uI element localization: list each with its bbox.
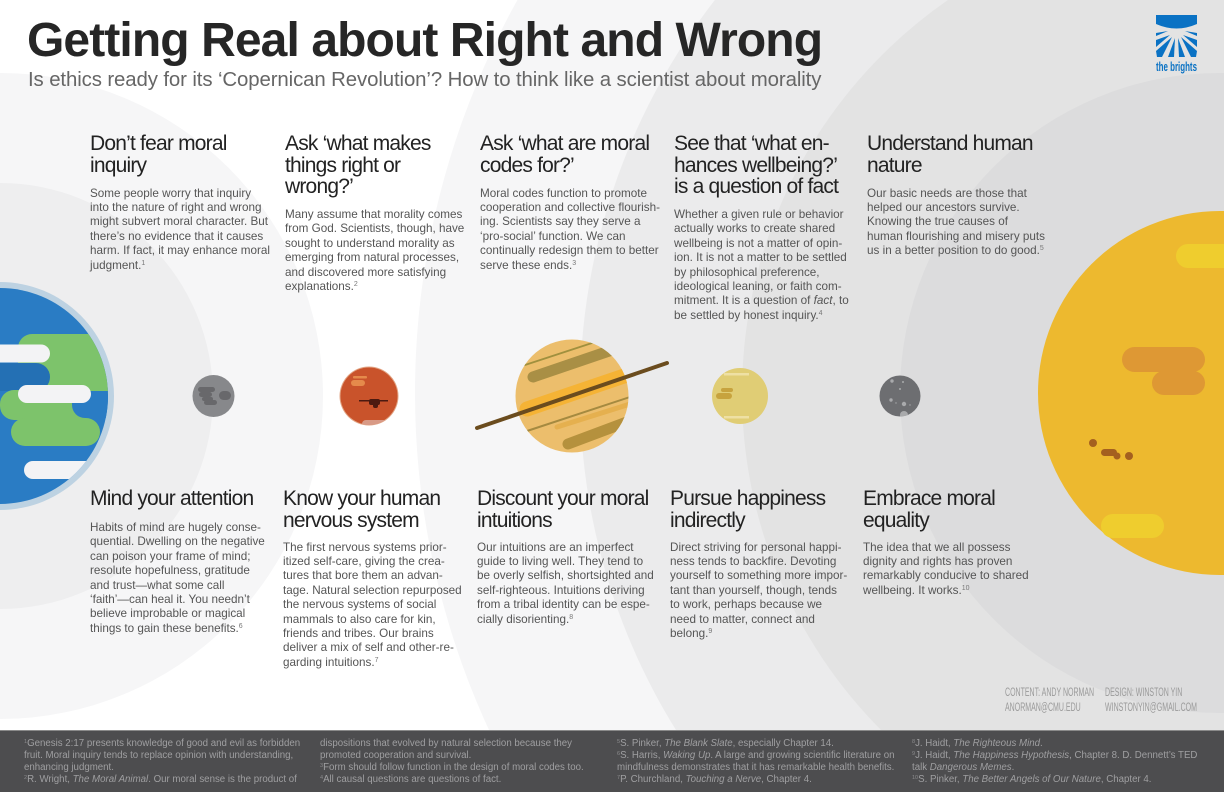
panel: Don't fear moral inquiry: might subvert moral character. But xyxy=(90,215,268,228)
panel: Understand human nature: helped our ancestors survive. xyxy=(867,201,1020,214)
panel: Ask what makes things right or wrong: explanations.2 xyxy=(285,280,358,293)
panel: See that what enhances wellbeing is a question of fact xyxy=(674,132,849,322)
panel: Pursue happiness indirectly: Pursue happiness xyxy=(670,487,825,510)
credits: content: ANORMAN@CMU.EDU xyxy=(1005,702,1081,714)
panel: Ask what makes things right or wrong xyxy=(285,132,464,293)
footnotes column 2: dispositions that evolved by natural selection because they xyxy=(320,738,572,749)
panel: Know your human nervous system: itized self-care, giving the crea- xyxy=(283,555,445,568)
icon: the brights logo: the brights xyxy=(1156,60,1197,74)
footnotes column 1 xyxy=(24,738,300,785)
panel: Understand human nature: human flourishing and misery puts xyxy=(867,230,1045,243)
panel: See that what enhances wellbeing is a question of fact: wellbeing is not a matter of opin- xyxy=(674,237,842,250)
panel: Mind your attention: Mind your attention xyxy=(90,487,253,510)
panel: Discount your moral intuitions: self-righteous. Intuitions deriving xyxy=(477,584,645,597)
footnotes column 3 xyxy=(617,738,894,785)
panel: See that what enhances wellbeing is a question of fact: hances wellbeing?’ xyxy=(674,154,837,176)
panel: Discount your moral intuitions: from a tribal identity can be espe- xyxy=(477,598,650,611)
panel: Embrace moral equality xyxy=(863,487,1029,597)
panel: Embrace moral equality: remarkably conducive to shared xyxy=(863,569,1029,582)
panel: See that what enhances wellbeing is a question of fact: by philosophical preference, xyxy=(674,266,820,279)
panel: Don't fear moral inquiry: harm. If fact, it may enhance moral xyxy=(90,244,270,257)
icon: earth xyxy=(0,282,114,510)
panel: Ask what makes things right or wrong: emerging from natural processes, xyxy=(285,251,459,264)
panel: Know your human nervous system: garding intuitions.7 xyxy=(283,656,379,669)
panel: Understand human nature: Our basic needs are those that xyxy=(867,186,1027,200)
panel: Discount your moral intuitions xyxy=(477,487,654,626)
footnotes column 1: 2R. Wright, The Moral Animal. Our moral sense is the product of xyxy=(24,774,297,785)
credits: content: CONTENT: ANDY NORMAN xyxy=(1005,687,1094,699)
icon: sun xyxy=(1038,211,1224,575)
panel: Embrace moral equality: equality xyxy=(863,508,929,532)
panel: Mind your attention: ‘faith’—can heal it. You needn’t xyxy=(90,593,250,606)
panel: Know your human nervous system: deliver a mix of self and other-re- xyxy=(283,641,454,654)
panel: Mind your attention: believe improbable or magical xyxy=(90,607,245,620)
panel: Don't fear moral inquiry: Don’t fear moral xyxy=(90,132,227,155)
panel: Ask what are moral codes for: serve these ends.3 xyxy=(480,259,576,272)
panel: Know your human nervous system: friends and tribes. Our brains xyxy=(283,627,434,640)
panel: Pursue happiness indirectly: ness tends to backfire. Devoting xyxy=(670,555,836,568)
panel: Ask what makes things right or wrong: sought to understand morality as xyxy=(285,237,455,250)
panel: Ask what makes things right or wrong: things right or xyxy=(285,154,400,176)
panel: Don't fear moral inquiry: inquiry xyxy=(90,154,146,176)
icon: the brights logo xyxy=(1156,15,1197,74)
panel: See that what enhances wellbeing is a question of fact: actually works to create shared xyxy=(674,222,835,235)
panel: Discount your moral intuitions: Our intuitions are an imperfect xyxy=(477,540,634,554)
panel: See that what enhances wellbeing is a question of fact: See that ‘what en- xyxy=(674,132,829,155)
panel: Embrace moral equality: Embrace moral xyxy=(863,487,995,510)
footnotes column 2: promoted cooperation and survival. xyxy=(320,750,471,761)
panel: See that what enhances wellbeing is a question of fact: mitment. It is a question of fact, to xyxy=(674,294,849,307)
panel: See that what enhances wellbeing is a question of fact: ideological leaning, or faith com- xyxy=(674,280,842,293)
panel: Ask what are moral codes for: ‘pro-social’ function. We can xyxy=(480,230,626,243)
panel: Don't fear moral inquiry: there’s no evidence that it causes xyxy=(90,230,263,243)
footnotes column 2: 3Form should follow function in the design of moral codes too. xyxy=(320,762,584,773)
panel: Know your human nervous system: Know your human xyxy=(283,487,440,510)
panel: Discount your moral intuitions: Discount your moral xyxy=(477,487,649,510)
panel: Pursue happiness indirectly: to work, perhaps because we xyxy=(670,598,822,611)
panel: Know your human nervous system: tures that bore them an advan- xyxy=(283,569,443,582)
footnotes column 4: 9J. Haidt, The Happiness Hypothesis, Chapter 8. D. Dennett’s TED xyxy=(912,750,1197,761)
icon: grey moon xyxy=(192,375,234,417)
credits: design: WINSTONYIN@GMAIL.COM xyxy=(1105,702,1197,714)
panel: Ask what are moral codes for: ing. Scientists say they serve a xyxy=(480,215,640,228)
footnotes column 3: 6S. Harris, Waking Up. A large and growing scientific literature on xyxy=(617,750,894,761)
panel: See that what enhances wellbeing is a question of fact: be settled by honest inquiry.4 xyxy=(674,309,823,322)
panel: Discount your moral intuitions: intuitions xyxy=(477,508,552,532)
panel: Know your human nervous system: The first nervous systems prior- xyxy=(283,540,447,554)
title: Getting Real about Right and Wrong xyxy=(27,14,822,66)
panel: Mind your attention: resolute hopefulness, gratitude xyxy=(90,564,250,577)
panel: Ask what makes things right or wrong: Ask ‘what makes xyxy=(285,132,431,155)
footnotes panel xyxy=(0,730,1224,792)
panel: Discount your moral intuitions: guide to living well. They tend to xyxy=(477,555,643,568)
panel: Embrace moral equality: wellbeing. It works.10 xyxy=(863,584,970,597)
credits: design xyxy=(1105,687,1197,714)
panel: Understand human nature: nature xyxy=(867,154,922,176)
panel: Pursue happiness indirectly: yourself to something more impor- xyxy=(670,569,847,582)
panel: Ask what are moral codes for: codes for?’ xyxy=(480,154,574,176)
panel: Pursue happiness indirectly: belong.9 xyxy=(670,627,712,640)
footnotes column 4: 10S. Pinker, The Better Angels of Our Nature, Chapter 4. xyxy=(912,774,1151,785)
panel: Ask what are moral codes for: Ask ‘what are moral xyxy=(480,132,649,155)
footnotes column 4: talk Dangerous Memes. xyxy=(912,762,1014,773)
panel: Pursue happiness indirectly: need to matter, connect and xyxy=(670,613,815,626)
panel: Understand human nature: Knowing the true causes of xyxy=(867,215,1008,228)
panel: Don't fear moral inquiry: Some people worry that inquiry xyxy=(90,186,251,200)
footnotes column 3: 7P. Churchland, Touching a Nerve, Chapter 4. xyxy=(617,774,812,785)
panel: Mind your attention: and trust—what some call xyxy=(90,579,224,592)
panel: Mind your attention: can poison your frame of mind; xyxy=(90,550,250,563)
icon: mars xyxy=(340,366,398,430)
credits: design: DESIGN: WINSTON YIN xyxy=(1105,687,1182,699)
panel: Embrace moral equality: The idea that we all possess xyxy=(863,540,1010,554)
icon: yellow planet xyxy=(712,368,768,424)
panel: Know your human nervous system: tage. Natural selection repurposed xyxy=(283,584,462,597)
panel: Understand human nature xyxy=(867,132,1045,257)
panel: Pursue happiness indirectly xyxy=(670,487,847,640)
panel: Ask what are moral codes for: cooperation and collective flourish- xyxy=(480,201,660,214)
panel: Embrace moral equality: dignity and rights has proven xyxy=(863,555,1012,568)
footnotes column 1: 1Genesis 2:17 presents knowledge of good and evil as forbidden xyxy=(24,738,300,749)
footnotes column 2: 4All causal questions are questions of fact. xyxy=(320,774,501,785)
footnotes column 2 xyxy=(320,738,584,785)
panel: Mind your attention xyxy=(90,487,265,635)
panel: See that what enhances wellbeing is a question of fact: Whether a given rule or behavior xyxy=(674,208,844,221)
credits: content xyxy=(1005,687,1094,714)
panel: Pursue happiness indirectly: Direct striving for personal happi- xyxy=(670,540,842,554)
panel: Ask what makes things right or wrong: Many assume that morality comes xyxy=(285,208,462,221)
icon: grey cratered planet xyxy=(880,376,920,419)
panel: Discount your moral intuitions: be overly selfish, shortsighted and xyxy=(477,569,654,582)
panel: Don't fear moral inquiry: into the nature of right and wrong xyxy=(90,201,262,214)
panel: See that what enhances wellbeing is a question of fact: ion. It is not a matter to be settled xyxy=(674,251,847,264)
panel: See that what enhances wellbeing is a question of fact: is a question of fact xyxy=(674,175,838,198)
panel: Don't fear moral inquiry: judgment.1 xyxy=(90,259,145,272)
panel: Don't fear moral inquiry xyxy=(90,132,270,272)
icon: saturn xyxy=(477,340,667,452)
panel: Ask what makes things right or wrong: wrong?’ xyxy=(285,175,353,198)
footnotes column 1: enhancing judgment. xyxy=(24,762,114,773)
footnotes column 3: mindfulness demonstrates that it has remarkable health benefits. xyxy=(617,762,894,773)
panel: Mind your attention: things to gain these benefits.6 xyxy=(90,622,243,635)
panel: Know your human nervous system: mammals to also care for kin, xyxy=(283,613,436,626)
panel: Know your human nervous system xyxy=(283,487,462,669)
panel: Ask what are moral codes for: Moral codes function to promote xyxy=(480,186,647,200)
panel: Ask what are moral codes for xyxy=(480,132,660,272)
panel: Understand human nature: us in a better position to do good.5 xyxy=(867,244,1044,257)
panel: Ask what makes things right or wrong: and discovered more satisfying xyxy=(285,266,446,279)
panel: Pursue happiness indirectly: indirectly xyxy=(670,508,745,532)
panel: Discount your moral intuitions: cially disorienting.8 xyxy=(477,613,573,626)
footnotes column 3: 5S. Pinker, The Blank Slate, especially Chapter 14. xyxy=(617,738,834,749)
panel: Know your human nervous system: nervous system xyxy=(283,508,419,532)
footnotes column 1: fruit. Moral inquiry tends to replace opinion with understanding, xyxy=(24,750,293,761)
panel: Know your human nervous system: the nervous systems of social xyxy=(283,598,436,611)
footnotes column 4: 8J. Haidt, The Righteous Mind. xyxy=(912,738,1043,749)
panel: Understand human nature: Understand human xyxy=(867,132,1033,155)
subtitle: Is ethics ready for its ‘Copernican Revolution’? How to think like a scientist about morality xyxy=(28,68,821,90)
panel: Ask what makes things right or wrong: from God. Scientists, though, have xyxy=(285,222,464,235)
panel: Ask what are moral codes for: continually redesign them to better xyxy=(480,244,659,257)
panel: Pursue happiness indirectly: tant than yourself, though, tends xyxy=(670,584,837,597)
footnotes column 4 xyxy=(912,738,1197,785)
panel: Mind your attention: quential. Dwelling on the negative xyxy=(90,535,265,548)
panel: Mind your attention: Habits of mind are hugely conse- xyxy=(90,521,261,534)
